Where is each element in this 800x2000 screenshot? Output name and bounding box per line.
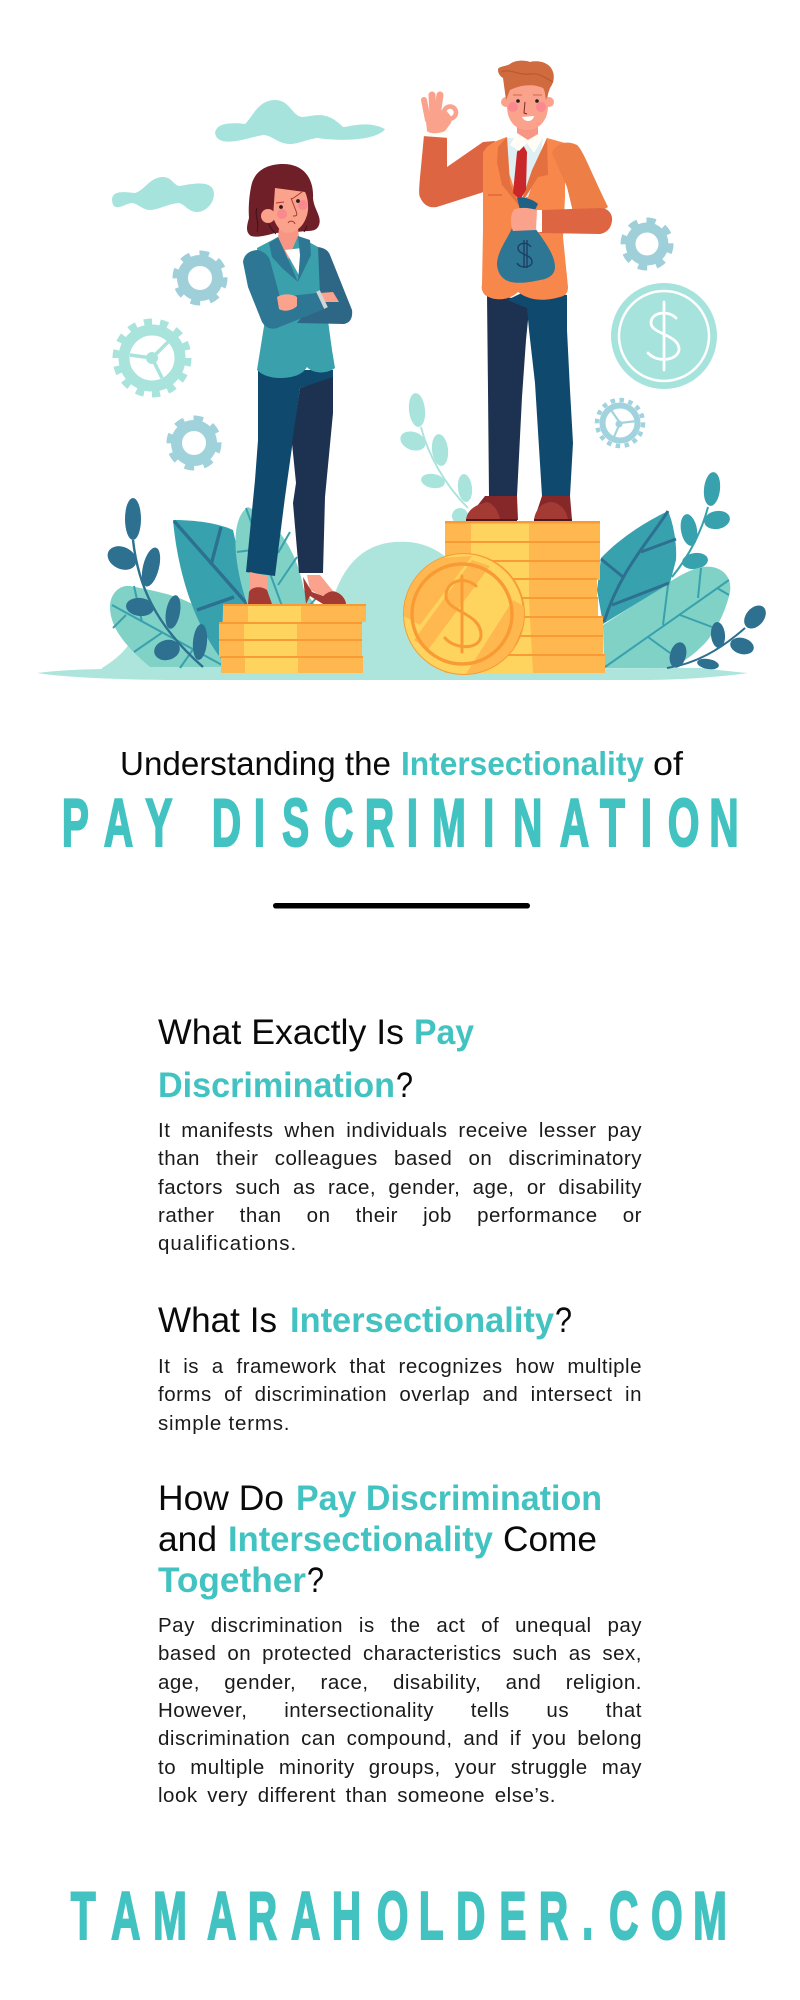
heading: what is intersectionality: What Is <box>158 1301 277 1340</box>
icon: dollar coin right <box>611 283 717 389</box>
jacket <box>243 236 352 378</box>
leaves right <box>597 471 770 671</box>
icon: large gear with spokes <box>116 322 188 394</box>
leaf: light behind legs <box>235 507 318 606</box>
heading: how do they come together: How Do <box>158 1479 284 1518</box>
leaf: dark teal right <box>597 511 676 624</box>
leaf: light left <box>110 586 225 668</box>
heading: what exactly is pay discrimination: Pay <box>414 1013 475 1052</box>
body text: how they come together: to multiple minority groups, your struggle may <box>158 1756 642 1779</box>
heading: what exactly is pay discrimination: Discrimination <box>158 1066 395 1105</box>
body text: how they come together: Pay discrimination is the act of unequal pay <box>158 1614 642 1637</box>
icon: small gear with spokes <box>597 400 643 446</box>
body text: intersectionality definition <box>158 1355 642 1435</box>
heading: how do they come together: Intersectionality <box>228 1520 494 1559</box>
icon: large dollar coin <box>400 553 530 680</box>
body text: intersectionality definition: forms of discrimination overlap and intersect in <box>158 1383 642 1406</box>
body text: how they come together: look very different than someone else’s. <box>158 1784 556 1807</box>
shoes <box>466 496 572 521</box>
hand OK gesture <box>424 95 456 138</box>
jacket <box>482 132 568 300</box>
body text: pay discrimination definition: rather than on their job performance or <box>158 1204 642 1227</box>
icon: gear lower left <box>170 418 218 468</box>
heading: what exactly is pay discrimination: What Exactly Is <box>158 1013 404 1052</box>
leaf: dark teal left <box>173 520 250 660</box>
body text: how they come together: age, gender, race, disability, and religion. <box>158 1671 642 1694</box>
heading: what is intersectionality <box>158 1301 572 1340</box>
figure: woman <box>243 164 352 604</box>
neck and face <box>501 85 554 140</box>
heading: how do they come together: Pay Discrimination <box>296 1479 602 1518</box>
ground and hill <box>37 542 748 680</box>
body text: how they come together: However, intersectionality tells us that <box>158 1699 642 1722</box>
coin stack: right <box>445 521 605 673</box>
title line: Intersectionality <box>401 745 645 782</box>
body text: how they come together <box>158 1614 642 1807</box>
body text: pay discrimination definition: factors such as race, gender, age, or disability <box>158 1176 642 1199</box>
title line: Understanding the <box>120 745 391 782</box>
leaf: light right <box>603 567 730 668</box>
body text: how they come together: based on protected characteristics such as sex, <box>158 1642 642 1665</box>
footer: website: TAMARAHOLDER.COM <box>71 1877 727 1954</box>
illustration: two workers on coin stacks <box>37 61 770 680</box>
heading: what exactly is pay discrimination: ? <box>396 1066 413 1105</box>
title line: of <box>653 745 684 782</box>
body text: pay discrimination definition <box>158 1119 642 1255</box>
heading: how do they come together: and <box>158 1520 217 1559</box>
leaves left <box>104 498 318 668</box>
title line <box>120 745 684 782</box>
shoes <box>248 572 346 604</box>
trousers <box>487 290 573 496</box>
right arm <box>536 143 612 234</box>
body text: intersectionality definition: It is a framework that recognizes how multiple <box>158 1355 642 1378</box>
coin stack: left <box>219 604 366 673</box>
hair <box>498 61 554 100</box>
heading: how do they come together: Come <box>503 1520 597 1559</box>
title: pay discrimination: PAYDISCRIMINATION <box>62 784 739 861</box>
heading: how do they come together <box>158 1479 602 1600</box>
trousers <box>246 370 333 576</box>
neck and face <box>256 188 308 262</box>
icon: gear upper left <box>176 254 224 302</box>
left raised arm <box>419 135 495 207</box>
heading: how do they come together: ? <box>307 1561 324 1600</box>
divider bar <box>273 903 530 908</box>
money bag <box>497 197 555 283</box>
body text: how they come together: discrimination can compound, and if you belong <box>158 1727 642 1750</box>
heading: what exactly is pay discrimination <box>158 1013 475 1105</box>
sprig: teal right <box>672 471 731 577</box>
sprig: light behind man <box>398 392 473 524</box>
body text: pay discrimination definition: than their colleagues based on discriminatory <box>158 1147 642 1170</box>
sprig: dark left <box>104 498 209 667</box>
heading: how do they come together: Together <box>158 1561 306 1600</box>
heading: what is intersectionality: Intersectionality <box>290 1301 555 1340</box>
heading: what is intersectionality: ? <box>555 1301 572 1340</box>
cloud: lower <box>112 177 214 212</box>
sprig: dark right <box>667 601 770 671</box>
body text: intersectionality definition: simple terms. <box>158 1412 290 1435</box>
body text: pay discrimination definition: qualifications. <box>158 1232 297 1255</box>
cloud: upper <box>215 100 385 144</box>
body text: pay discrimination definition: It manifests when individuals receive lesser pay <box>158 1119 642 1142</box>
figure: man <box>419 61 612 521</box>
icon: gear upper right <box>624 220 670 268</box>
hair <box>247 164 320 237</box>
